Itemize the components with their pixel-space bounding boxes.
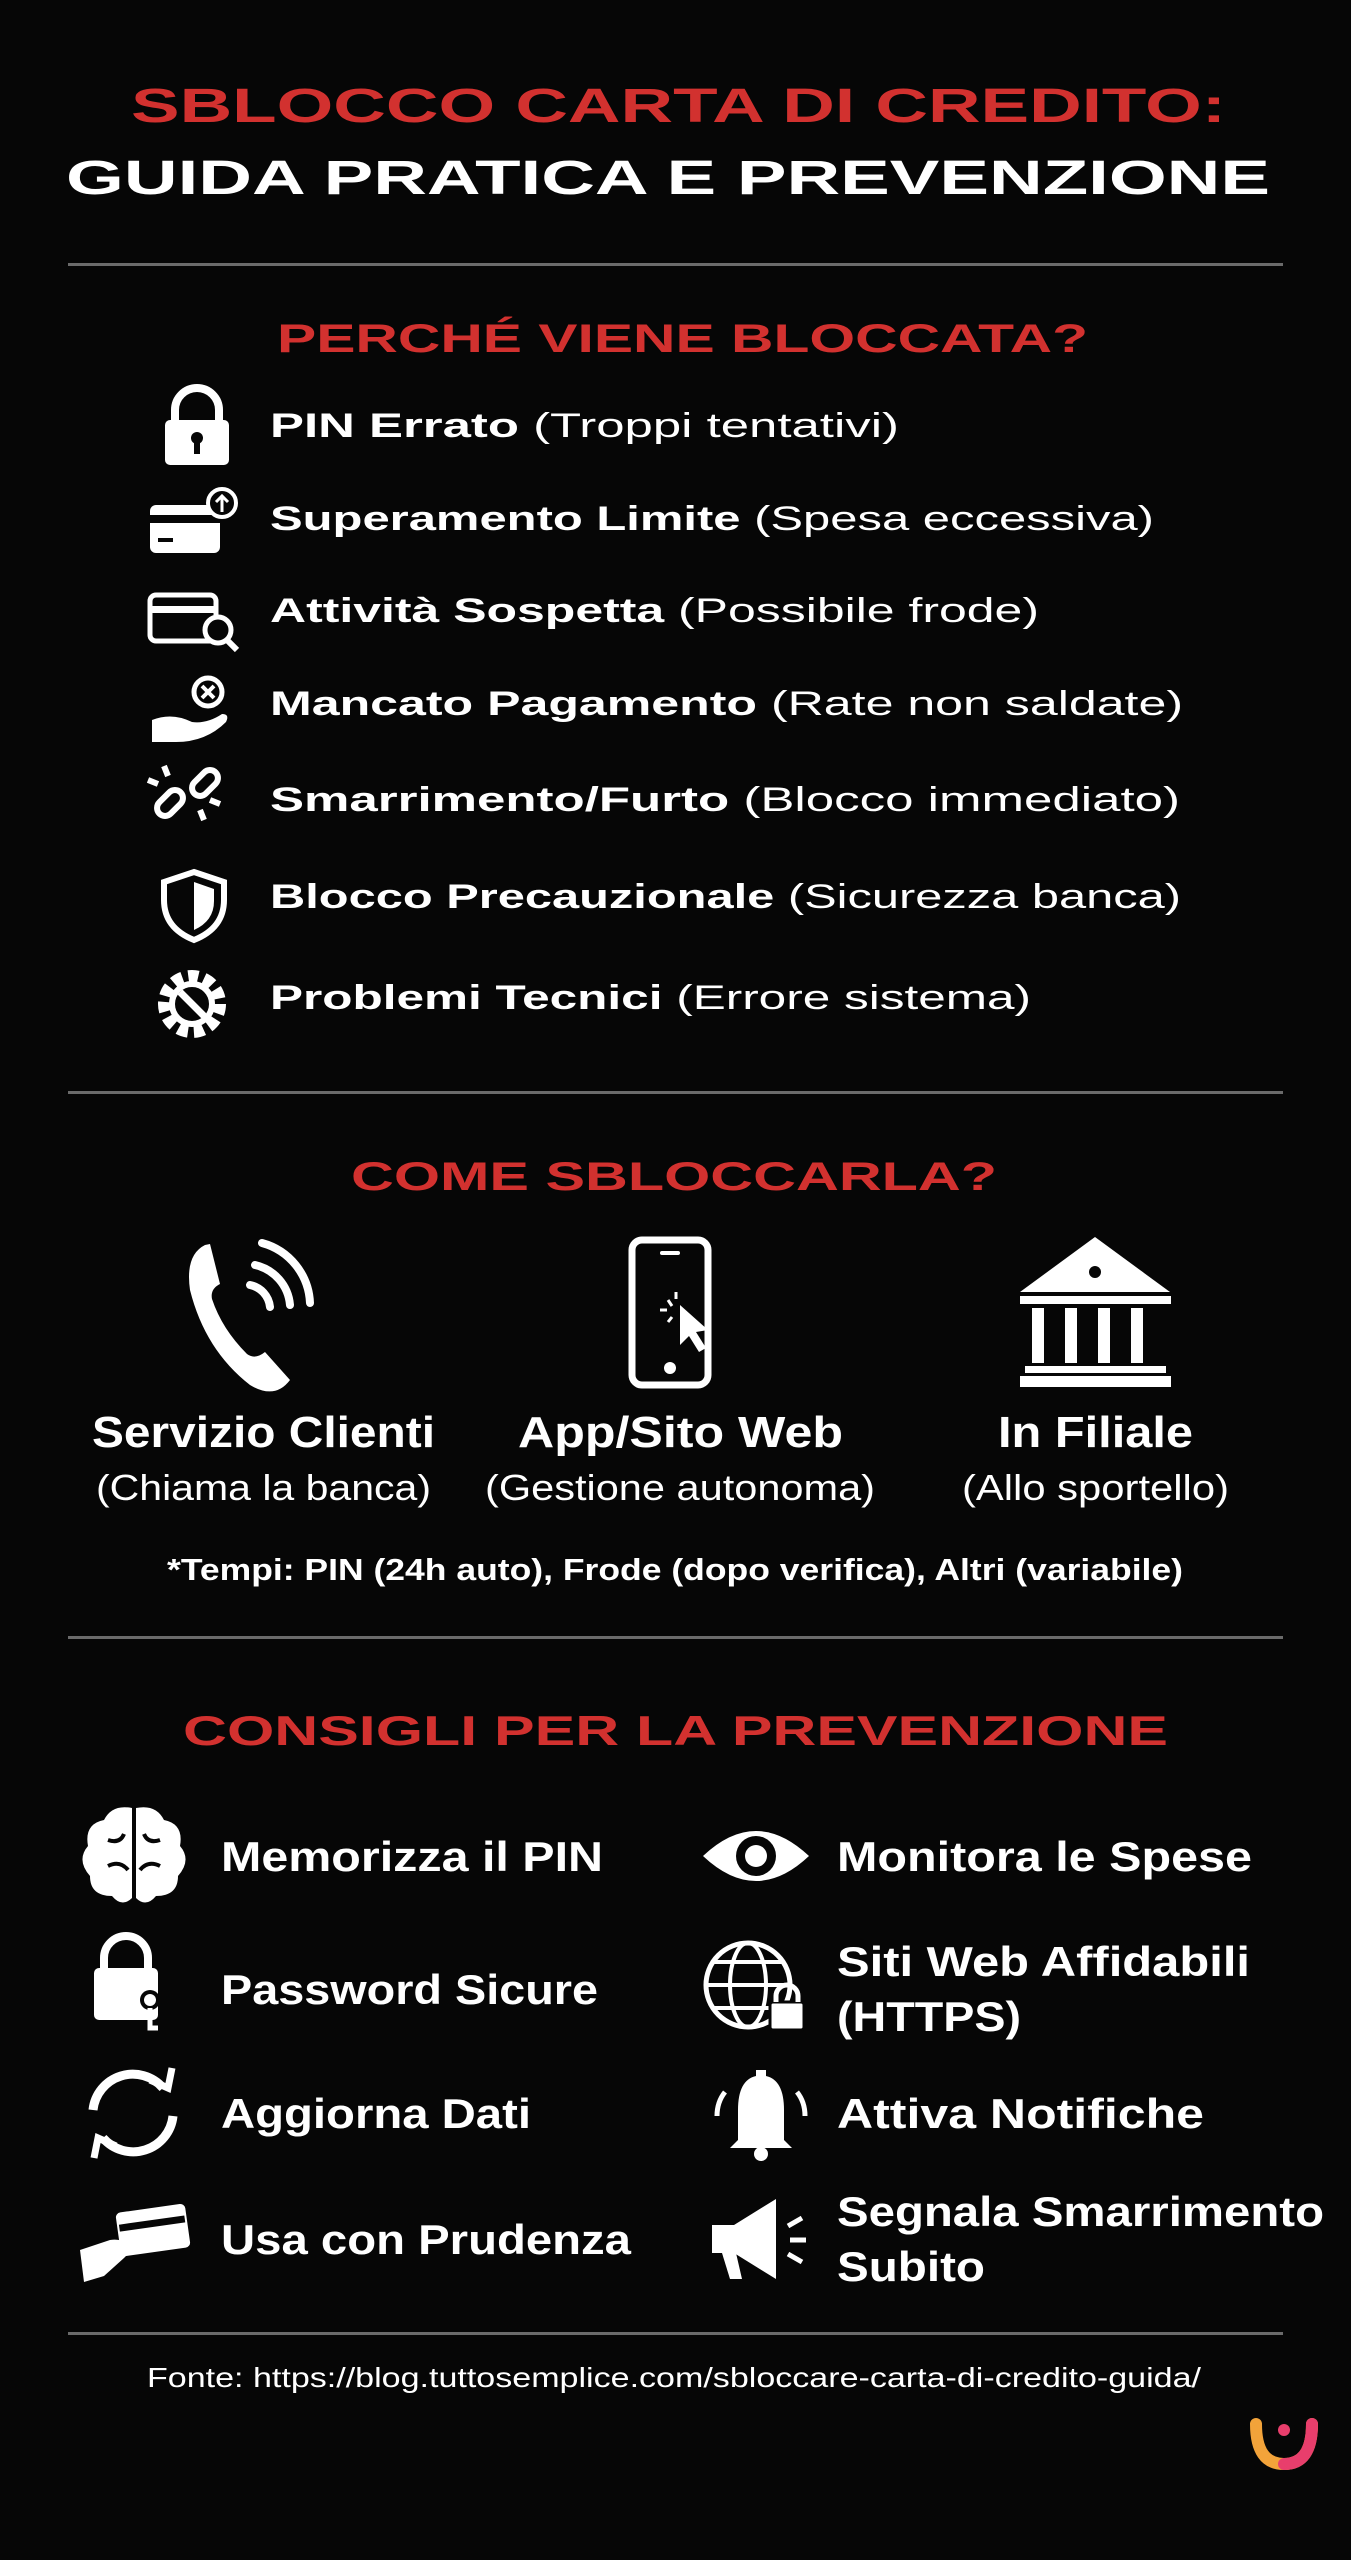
label: app/sito web [485, 1408, 875, 1508]
tip: password sicure: Password Sicure [221, 1966, 598, 2013]
tip: siti web affidabili: Siti Web Affidabili [837, 1938, 1250, 1985]
icon: card search [150, 595, 237, 650]
icon: smartphone [632, 1240, 708, 1385]
icon: eye [703, 1831, 809, 1881]
tip: memorizza il pin: Memorizza il PIN [221, 1833, 603, 1880]
icon: bell [717, 2070, 805, 2161]
note: tempi: *Tempi: PIN (24h auto), Frode (dopo verifica), Altri (variabile) [167, 1552, 1183, 1587]
tip: attiva notifiche: Attiva Notifiche [837, 2090, 1204, 2137]
item: mancato pagamento: Mancato Pagamento (Rate non saldate) [270, 685, 1183, 723]
title: SBLOCCO CARTA DI CREDITO: [131, 80, 1226, 133]
icon: refresh [93, 2068, 173, 2158]
item: PIN errato: PIN Errato (Troppi tentativi) [270, 407, 899, 445]
label: in filiale: In Filiale [998, 1408, 1193, 1457]
heading: perché viene bloccata: PERCHÉ VIENE BLOCCATA? [277, 316, 1088, 361]
icon: broken link [148, 766, 221, 820]
icon: card limit [150, 489, 236, 553]
label: servizio clienti: Servizio Clienti [92, 1408, 435, 1457]
item: blocco precauzionale: Blocco Precauzionale (Sicurezza banca) [270, 878, 1181, 916]
icon: hand payment [152, 678, 227, 742]
item: superamento limite: Superamento Limite (Spesa eccessiva) [270, 500, 1154, 538]
icon: megaphone [712, 2199, 806, 2279]
tip: monitora le spese: Monitora le Spese [837, 1833, 1252, 1880]
title [66, 80, 1270, 205]
icon: hand with card [80, 2203, 191, 2282]
tip: aggiorna dati: Aggiorna Dati [221, 2090, 531, 2137]
tip: segnala smarrimento: Segnala Smarrimento [837, 2188, 1324, 2235]
label: servizio clienti: (Chiama la banca) [96, 1467, 431, 1508]
panel: causes list [148, 388, 1183, 1032]
title: GUIDA PRATICA E PREVENZIONE [66, 152, 1270, 205]
icon: lock key [94, 1936, 160, 2028]
label: app/sito web: App/Sito Web [518, 1408, 843, 1457]
icon: bank [1020, 1237, 1171, 1387]
icon: brain [82, 1807, 186, 1903]
label: app/sito web: (Gestione autonoma) [485, 1467, 875, 1508]
icon: shield [164, 872, 224, 940]
logo [1256, 2424, 1312, 2464]
panel: unlock methods [92, 1237, 1229, 1587]
heading: come sbloccarla: COME SBLOCCARLA? [351, 1155, 997, 1199]
panel: tips: Subito [837, 2243, 985, 2290]
icon: phone [189, 1243, 310, 1391]
icon: lock [165, 388, 229, 465]
panel: tips [80, 1807, 1324, 2290]
source: Fonte: https://blog.tuttosemplice.com/sbloccare-carta-di-credito-guida/ [147, 2362, 1201, 2393]
panel: tips: (HTTPS) [837, 1993, 1021, 2040]
tip: usa con prudenza: Usa con Prudenza [221, 2216, 632, 2263]
icon: gear wrench [164, 976, 220, 1032]
item: smarrimento/furto: Smarrimento/Furto (Blocco immediato) [270, 781, 1180, 819]
item: problemi tecnici: Problemi Tecnici (Errore sistema) [270, 979, 1031, 1017]
icon: globe lock [706, 1943, 804, 2030]
heading: consigli: CONSIGLI PER LA PREVENZIONE [183, 1707, 1168, 1754]
item: attività sospetta: Attività Sospetta (Possibile frode) [270, 592, 1039, 630]
label: in filiale: (Allo sportello) [962, 1467, 1229, 1508]
label: servizio clienti [92, 1408, 435, 1508]
label: in filiale [962, 1408, 1229, 1508]
